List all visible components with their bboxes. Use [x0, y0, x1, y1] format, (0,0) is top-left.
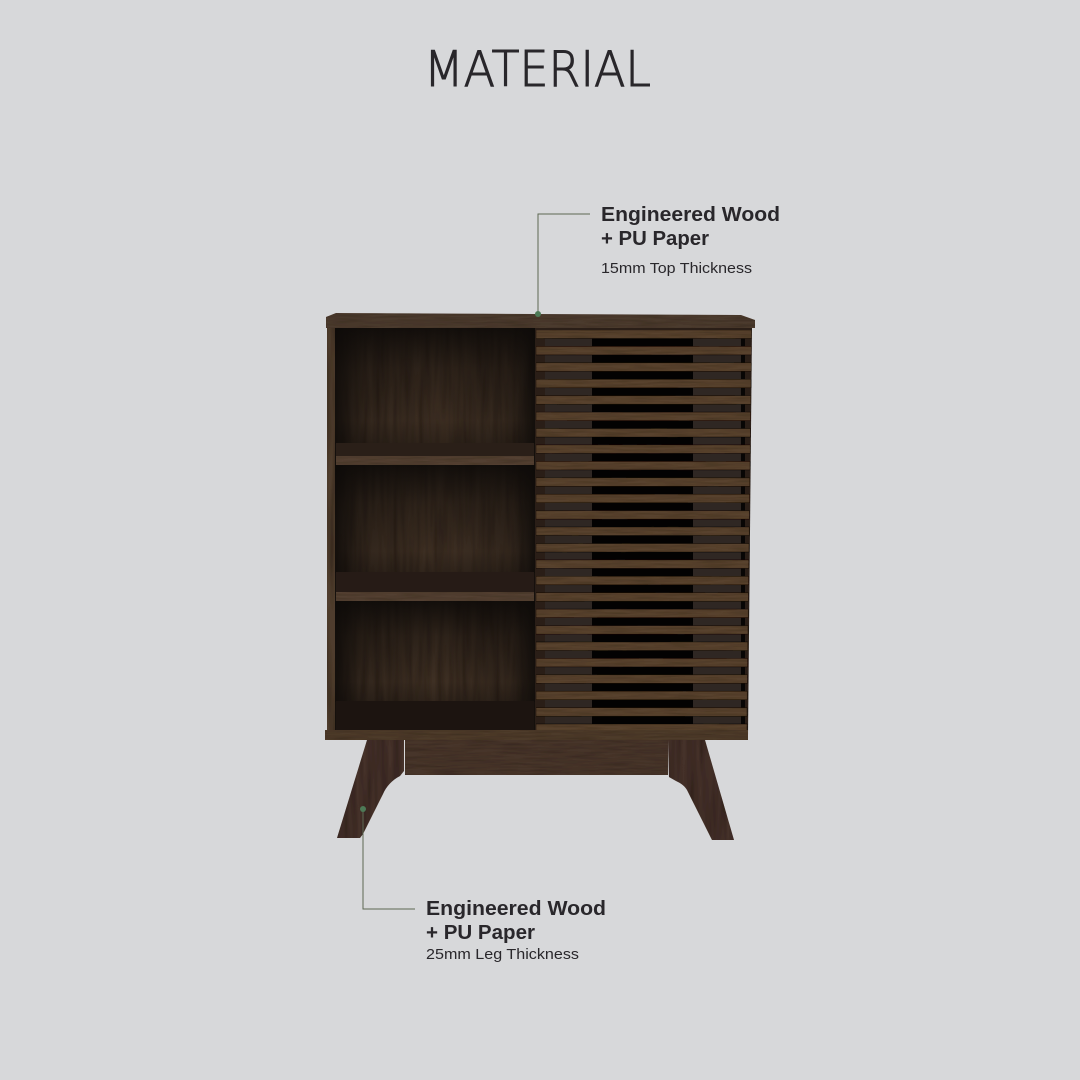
marker: top	[535, 311, 541, 317]
heading line 2: top material: + PU Paper	[601, 228, 709, 250]
callout: top material	[535, 204, 780, 317]
upper shelf surface	[336, 443, 534, 456]
leader line: leg	[363, 810, 415, 909]
title: MATERIAL	[424, 41, 651, 98]
right grey-brown backing	[693, 335, 742, 727]
door backing	[535, 328, 752, 736]
heading line 2: leg material: + PU Paper	[426, 922, 535, 944]
black centre gap	[592, 335, 693, 727]
bottom rail	[325, 730, 748, 740]
right leg	[668, 740, 734, 840]
callout: leg material	[360, 806, 606, 963]
apron	[405, 740, 668, 775]
left grey-brown backing	[545, 335, 592, 727]
heading: top material: Engineered Wood	[601, 204, 780, 226]
middle shelf front	[336, 592, 534, 601]
open shelf unit	[327, 327, 536, 732]
right black gap	[741, 335, 745, 727]
marker: leg	[360, 806, 366, 812]
left side panel	[327, 327, 335, 732]
side shading of compartments	[335, 328, 535, 730]
note: top thickness: 15mm Top Thickness	[601, 260, 752, 277]
middle compartment shading	[335, 465, 535, 573]
upper shelf front	[336, 456, 534, 465]
note: leg thickness: 25mm Leg Thickness	[426, 946, 579, 963]
left leg	[337, 740, 404, 838]
top board	[326, 313, 755, 328]
leader line: top	[538, 214, 590, 313]
bottom shelf surface	[336, 701, 534, 730]
heading: leg material: Engineered Wood	[426, 898, 606, 920]
back panel	[335, 328, 536, 731]
door slats	[536, 330, 752, 732]
lower compartment shading	[335, 601, 535, 702]
slatted door	[535, 328, 752, 736]
cabinet illustration	[325, 313, 755, 840]
upper compartment shading	[335, 328, 535, 444]
middle shelf surface	[336, 572, 534, 592]
